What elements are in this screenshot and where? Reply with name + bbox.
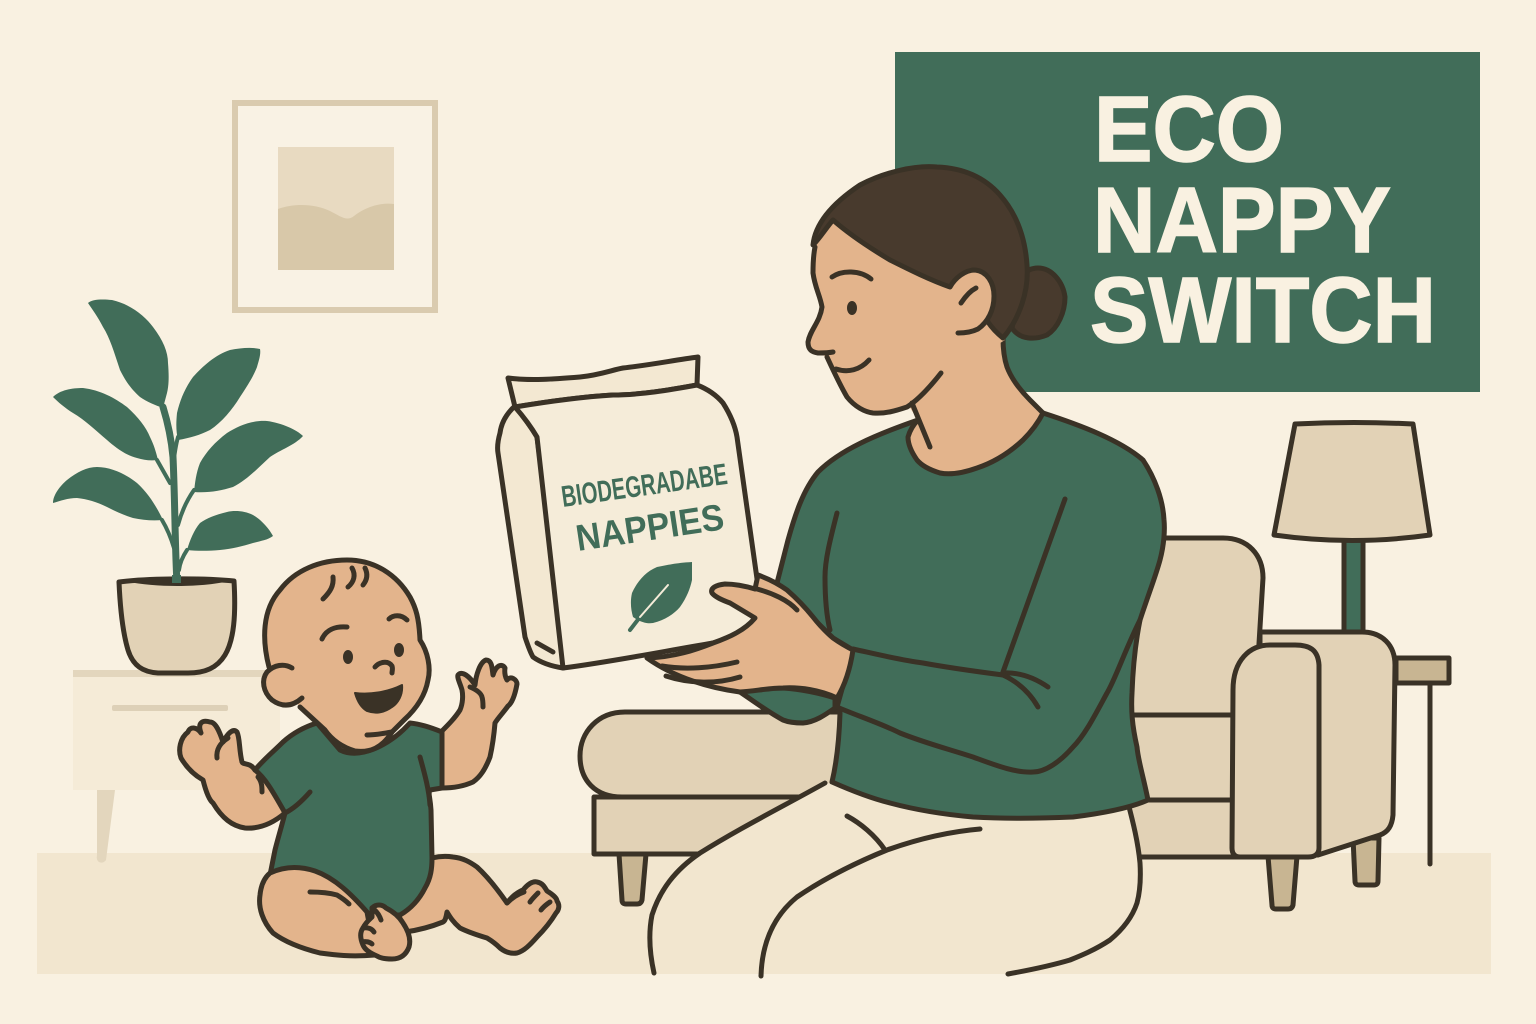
mother sweater arm lines [825, 499, 1140, 772]
baby left leg [260, 867, 375, 956]
mother face [808, 212, 1005, 413]
baby right arm [440, 660, 517, 788]
side table with drawer [73, 670, 280, 863]
bag label: biodegradabe: BIODEGRADABE [559, 458, 729, 514]
mother back sleeve [740, 688, 835, 723]
mother neck [905, 335, 1043, 474]
potted plant [53, 299, 303, 673]
baby left arm [180, 721, 285, 828]
baby [180, 560, 559, 959]
mother hair [813, 167, 1027, 338]
title: eco nappy switch: ECO [1094, 77, 1284, 181]
title banner [895, 52, 1480, 392]
baby onesie [255, 723, 442, 915]
biodegradable nappies bag [498, 357, 760, 668]
mother [498, 167, 1164, 976]
baby foot with toes [361, 905, 410, 959]
bag label: nappies: NAPPIES [573, 496, 727, 559]
mother hands [647, 575, 853, 698]
sofa back and seat [1100, 538, 1263, 857]
framed picture [235, 103, 435, 310]
floor [37, 853, 1491, 974]
mother bun [1012, 268, 1065, 338]
bag side gusset [498, 406, 567, 668]
title: eco nappy switch: SWITCH [1090, 258, 1436, 362]
baby head [265, 560, 429, 751]
title: eco nappy switch [1090, 77, 1436, 362]
mother legs and trousers [650, 783, 1140, 976]
sofa [580, 538, 1395, 909]
mother facial features [832, 272, 930, 447]
bag top flap [508, 357, 698, 407]
icon: leaf on bag [630, 562, 692, 630]
sofa base and left seat cushion [594, 797, 860, 854]
mother ear [935, 270, 994, 333]
baby right leg and foot [395, 856, 559, 953]
plant pot [119, 579, 235, 673]
right side table [1396, 658, 1449, 864]
mother torso and sweater [777, 413, 1164, 818]
floor lamp [1274, 422, 1430, 632]
sofa arm side [1260, 632, 1395, 855]
title: eco nappy switch: NAPPY [1093, 168, 1391, 272]
sofa arm front [1232, 645, 1319, 857]
bag front [515, 385, 760, 668]
plant stems [157, 407, 194, 583]
plant leaves [53, 299, 303, 551]
baby ear [264, 665, 302, 705]
sofa legs [619, 854, 646, 904]
baby face [322, 568, 407, 713]
